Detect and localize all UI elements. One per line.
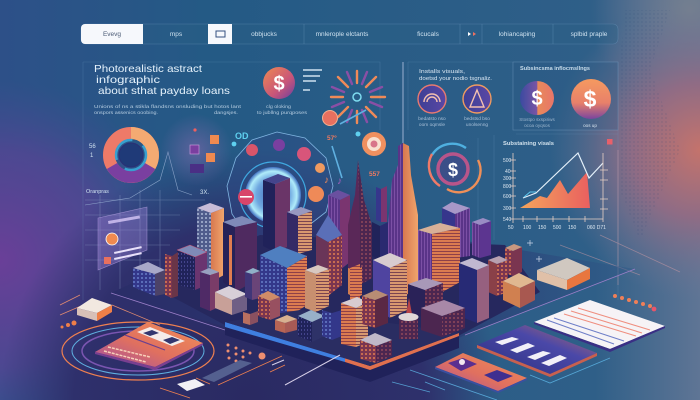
- building: navy pink: [459, 258, 489, 323]
- nav labels: splbid praple: [571, 31, 608, 38]
- cross sparkles: [527, 240, 542, 262]
- icon: dollar coin: [263, 67, 295, 99]
- chart: substaining visuals area chart: [503, 139, 612, 231]
- panel text: Installs visuals,: [419, 69, 466, 75]
- money stack: [537, 258, 590, 290]
- portal icons: ♪: [337, 176, 342, 187]
- chart: donut: [109, 133, 153, 177]
- building: brick mid: [488, 256, 508, 296]
- building: purple low: [200, 268, 219, 311]
- chart axis numbers: 50: [508, 225, 514, 231]
- building: cream stripes: [305, 265, 329, 312]
- title: Photorealistic astract: [94, 63, 202, 75]
- chart: radial sunburst: [331, 71, 385, 123]
- chart accent line: [524, 192, 536, 197]
- nav labels: [103, 31, 608, 38]
- building: front corner: [360, 333, 392, 363]
- coin captions: ocoa oyqsos: [524, 123, 551, 128]
- chart axis numbers: 100: [523, 225, 532, 231]
- building: small left: [133, 262, 165, 296]
- portal icons: ♪: [324, 175, 329, 186]
- building: pyramid roof: [316, 215, 342, 296]
- nav tab: active: [81, 24, 143, 44]
- accent lines: [392, 358, 610, 400]
- building: window block: [287, 207, 312, 254]
- chart axes: [510, 153, 608, 223]
- building: dark portal tower: [263, 174, 290, 252]
- donut labels: 56: [89, 144, 96, 150]
- chart heading: Substaining visals: [503, 141, 554, 147]
- hologram panel: [98, 207, 147, 270]
- panel: substance infographics: [513, 62, 618, 130]
- chart area: [520, 172, 590, 208]
- icon: ring dollar: [429, 144, 481, 192]
- chart axis numbers: 600: [503, 194, 512, 200]
- thin mast on main skyscraper: [402, 62, 404, 143]
- label: OD: OD: [235, 131, 249, 141]
- chart axis numbers: 500: [503, 158, 512, 164]
- description text: Unions of ns a stikla flandsns onsluding but hotos lant: [94, 104, 242, 110]
- building: blue windows: [322, 310, 342, 340]
- nav arrows: [468, 32, 476, 36]
- description text: onspors assenics ooobing.: [94, 110, 158, 116]
- nav labels: Evevg: [103, 31, 121, 38]
- coin captions: Stostpo sxspiriws: [519, 117, 555, 122]
- icon captions: [418, 116, 490, 128]
- icon captions: unolsenng: [466, 122, 488, 128]
- nav labels: lohiancaping: [499, 31, 536, 38]
- tablet rows: [495, 337, 567, 366]
- chart marker: [607, 139, 612, 144]
- building: brick wide: [421, 300, 465, 337]
- description text: [94, 104, 308, 116]
- building: rear left block: [348, 267, 362, 298]
- description text: to jubllng purqposes: [257, 110, 308, 116]
- building: brick cluster: [258, 291, 280, 320]
- title: infographic: [96, 74, 160, 86]
- donut labels: 1: [90, 153, 94, 159]
- credit card on ring: [62, 322, 214, 380]
- icon: ring dollar: $: [448, 160, 458, 180]
- raised platform: [225, 310, 459, 382]
- building: small brown: [243, 311, 258, 325]
- building: tall left stripe: [197, 203, 224, 282]
- title: [94, 63, 230, 97]
- building: cream low: [215, 286, 247, 315]
- building: right brick rear: [505, 244, 522, 276]
- building: cream small: [275, 315, 297, 333]
- chart axis numbers: [503, 158, 606, 231]
- building: spire tower: [348, 160, 372, 285]
- ground floor: [111, 230, 635, 382]
- donut labels: [86, 144, 209, 196]
- tablet: [477, 325, 597, 377]
- coin: right: $: [584, 86, 597, 112]
- chart axis numbers: 500: [553, 225, 562, 231]
- chart axis numbers: 40: [505, 169, 511, 175]
- foreground buildings: [243, 278, 465, 363]
- dot cluster: [226, 344, 266, 362]
- labels: numbers: 57º: [327, 135, 337, 142]
- rings: [62, 322, 214, 380]
- building: dark low: [408, 278, 443, 318]
- nav labels: mnlerople elctants: [316, 31, 369, 38]
- chart axis numbers: 800: [503, 184, 512, 190]
- icon captions: bedstsd bso: [464, 116, 490, 122]
- left dots: [60, 320, 76, 328]
- description text: clg oloking: [266, 104, 291, 110]
- small box: [77, 298, 112, 321]
- icon: dollar coin: $: [273, 73, 285, 95]
- title: about sthat payday loans: [98, 85, 230, 97]
- panel: installs visuals: [418, 69, 493, 128]
- building: big blue: [260, 246, 307, 318]
- chart axis numbers: 540: [503, 217, 512, 223]
- building: pink low: [503, 273, 535, 308]
- labels: numbers: [327, 135, 380, 178]
- building: navy left of main tower: [372, 186, 388, 260]
- nav labels: ficucals: [417, 31, 440, 38]
- building: blue cream windows: [373, 253, 407, 318]
- city underlay: [150, 235, 540, 370]
- chart axis numbers: 060 D71: [587, 225, 606, 231]
- building: brick right: [362, 290, 388, 328]
- building: navy windows: [298, 310, 325, 342]
- donut labels: 3X.: [200, 190, 209, 196]
- gradient card: [435, 353, 527, 393]
- document: [534, 300, 665, 352]
- panel text: doetsd your nodio tsgnaliz.: [419, 76, 493, 82]
- chart axis numbers: 300: [503, 206, 512, 212]
- navigation bar: [81, 24, 618, 44]
- icon captions: bedatsto nso: [418, 116, 446, 122]
- icon: list lines: [303, 70, 322, 90]
- nav labels: obbjucks: [251, 31, 278, 38]
- building: rear purple: [442, 202, 470, 258]
- portal icons: [238, 139, 342, 205]
- donut labels: Oranpras: [86, 189, 109, 195]
- nav labels: mps: [170, 31, 183, 38]
- panel heading: Subsincsma inflocmsllngs: [520, 66, 590, 72]
- cityscape: [133, 62, 535, 323]
- chart line: [523, 153, 603, 198]
- coin captions: oos up: [583, 123, 597, 128]
- building: small dark: [245, 268, 260, 300]
- description text: dangsjes.: [214, 110, 238, 116]
- chart axis numbers: 150: [568, 225, 577, 231]
- labels: numbers: 557: [369, 171, 380, 178]
- portal wheel: [227, 132, 342, 240]
- icon cluster: floating squares: [160, 114, 236, 186]
- coin: left: $: [531, 88, 543, 110]
- chart axis numbers: 150: [538, 225, 547, 231]
- coin captions: [519, 117, 597, 128]
- icon: round building: [463, 85, 491, 113]
- building: white round tower: [398, 298, 418, 339]
- panel text: [419, 69, 493, 82]
- line chart grid: [85, 152, 205, 290]
- icon: target coins: [322, 110, 386, 178]
- building: navy orange stripe: [223, 216, 257, 292]
- building: purple block: [328, 190, 350, 270]
- icon: round gauge: [418, 85, 446, 113]
- building: navy rear: [177, 245, 207, 290]
- building: slim purple: [472, 218, 491, 258]
- building: main skyscraper: [388, 143, 418, 298]
- orange dot row: [613, 294, 656, 311]
- nav icon box: [208, 24, 232, 44]
- icon captions: oom oqmsle: [419, 122, 445, 128]
- building: orange stripes: [341, 297, 368, 347]
- chart axis numbers: 300: [503, 176, 512, 182]
- small note and bars: [160, 355, 340, 398]
- building: tall orange: [418, 223, 460, 298]
- building: tall right brick: [350, 264, 360, 304]
- building: narrow brick: [165, 252, 178, 298]
- card: [95, 322, 203, 367]
